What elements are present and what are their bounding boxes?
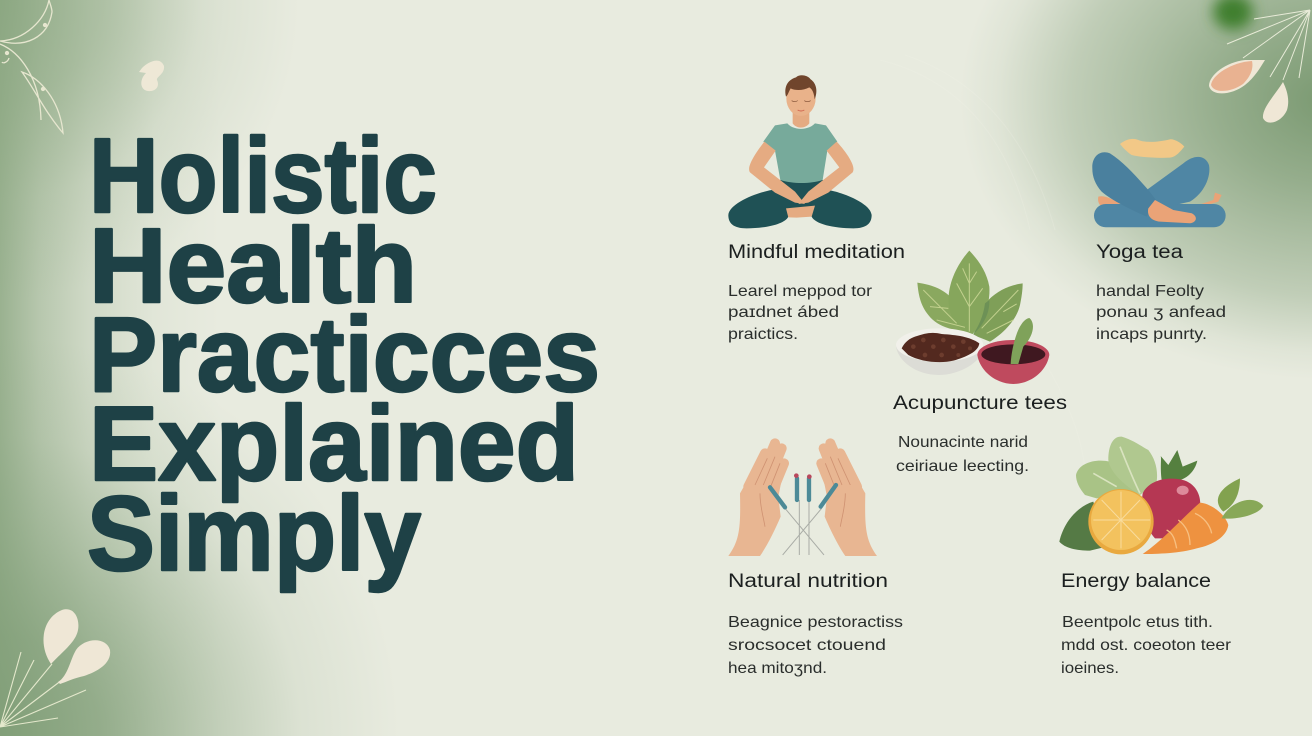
icon: hands with needles <box>728 443 877 556</box>
title: Health <box>89 207 417 325</box>
text: yoga tea body <box>1096 283 1226 343</box>
decoration: bottom-left petals <box>0 609 110 727</box>
decoration: small cream blob <box>139 61 164 91</box>
text: mindful meditation body <box>728 283 873 343</box>
decoration: top-left line-art leaves <box>0 0 63 133</box>
heading: acupuncture tees: Acupuncture tees <box>893 393 1067 414</box>
text: natural nutrition body: Beagnice pestoractiss <box>728 614 903 631</box>
text: energy balance body: Beentpolc etus tith. <box>1062 614 1213 631</box>
heading: mindful meditation: Mindful meditation <box>728 242 905 263</box>
text: mindful meditation body: praictics. <box>728 326 798 343</box>
title: Holistic <box>89 117 437 235</box>
text: acupuncture tees body: ceiriaue leecting. <box>896 458 1029 475</box>
icon: yoga legs <box>1092 139 1226 227</box>
text: yoga tea body: handal Feolty <box>1096 283 1204 300</box>
decoration: top-right rays and leaves <box>1209 10 1310 123</box>
text: yoga tea body: ponau ʒ anfead <box>1096 304 1226 321</box>
text: acupuncture tees body <box>896 434 1029 475</box>
text: natural nutrition body <box>728 614 903 677</box>
icon: fruit and vegetables <box>1059 437 1263 554</box>
icon: meditating person <box>728 75 872 228</box>
heading: yoga tea: Yoga tea <box>1096 242 1183 263</box>
icon: leaves and bowls <box>896 251 1049 384</box>
heading: energy balance: Energy balance <box>1061 571 1211 592</box>
text: yoga tea body: incaps punrty. <box>1096 326 1207 343</box>
title: Simply <box>87 475 421 593</box>
text: acupuncture tees body: Nounacinte narid <box>898 434 1028 451</box>
text: energy balance body: mdd ost. coeoton teer <box>1061 637 1232 654</box>
text: natural nutrition body: srocsocet ctouend <box>728 637 886 654</box>
text: mindful meditation body: paɪdnet ábed <box>728 304 839 321</box>
heading: natural nutrition: Natural nutrition <box>728 571 888 592</box>
text: energy balance body <box>1061 614 1232 677</box>
text: energy balance body: ioeines. <box>1061 660 1119 677</box>
title <box>87 117 600 593</box>
text: mindful meditation body: Learel meppod tor <box>728 283 873 300</box>
text: natural nutrition body: hea mitoʒnd. <box>728 660 827 677</box>
title: Explained <box>89 385 579 503</box>
title: Practicces <box>89 296 600 414</box>
